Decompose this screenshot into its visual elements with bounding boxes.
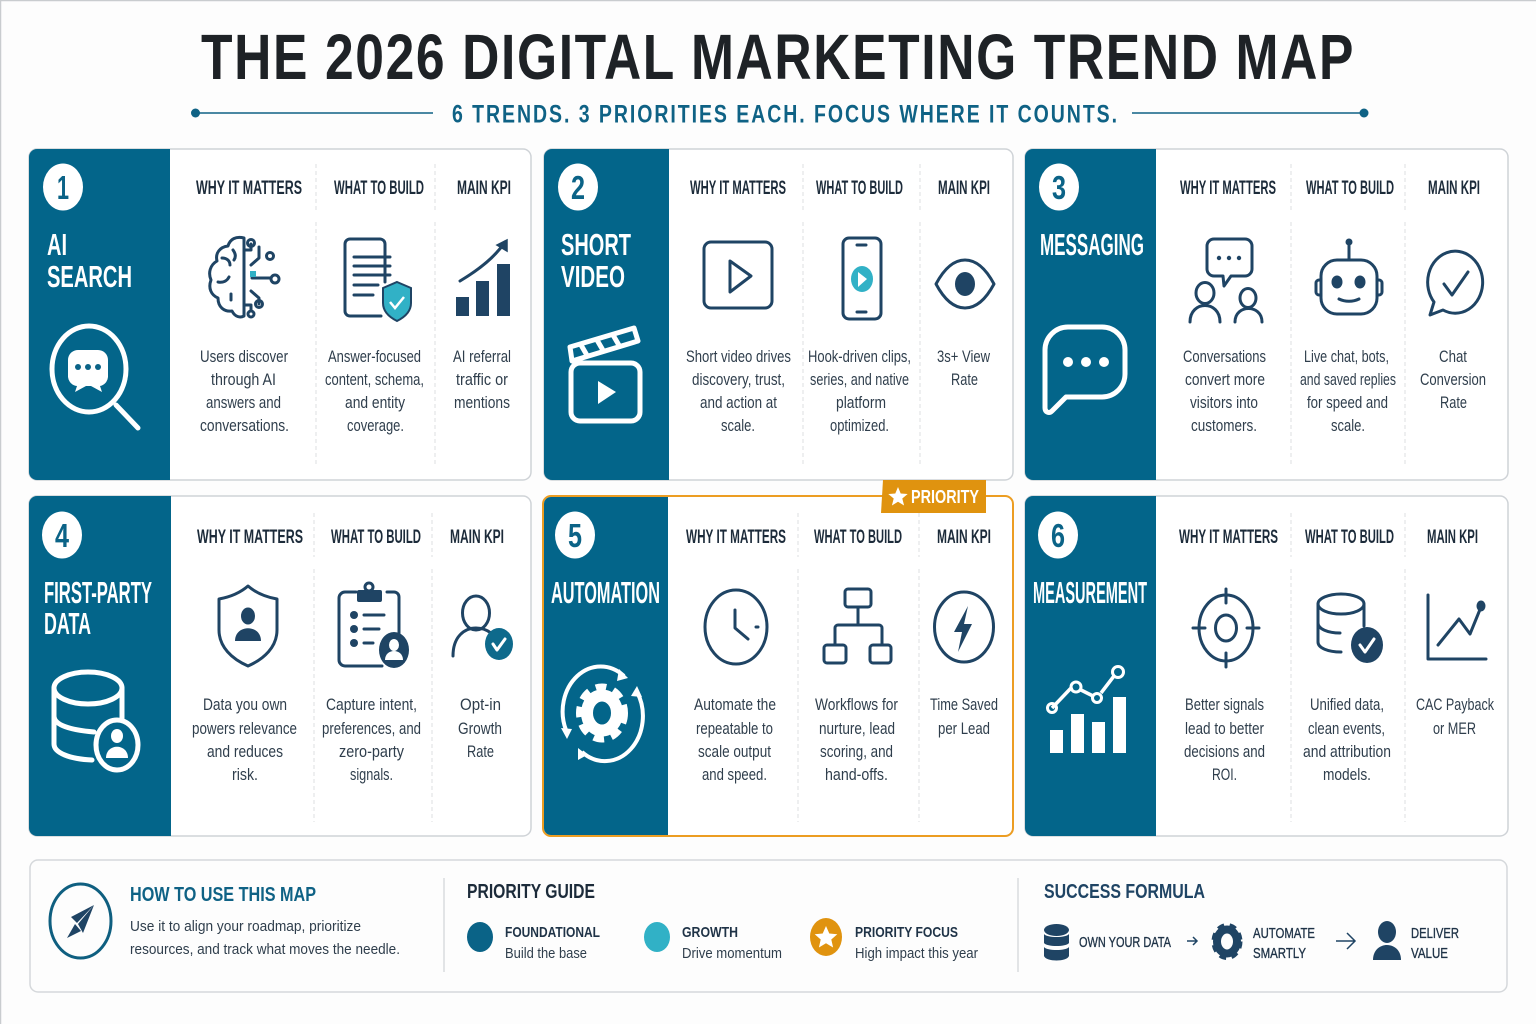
text: what to build: signals. [350,765,393,784]
text: why it matters: decisions and [1184,742,1265,761]
column headers: WHY IT MATTERS [1180,178,1276,199]
text: main kpi: 3s+ View [937,347,991,366]
text: what to build: for speed and [1307,393,1388,412]
column headers: WHY IT MATTERS [690,178,786,199]
heading: First-Party Data [44,575,152,641]
column headers: WHY IT MATTERS [686,527,786,548]
column headers [1180,178,1480,199]
text: main kpi [453,347,511,412]
column headers: MAIN KPI [1427,527,1478,548]
priority badge: PRIORITY [911,487,979,507]
number badge 1 [43,164,83,210]
text: why it matters: discovery, trust, [692,370,785,389]
text: why it matters: lead to better [1185,719,1264,738]
column headers: WHY IT MATTERS [1179,527,1278,548]
panel: 5 Automation (priority) [543,480,1013,836]
text: why it matters: conversations. [200,416,289,435]
automate smartly: AUTOMATE [1253,925,1315,942]
text: what to build: models. [1323,765,1371,784]
arrow [1336,933,1355,949]
how to use this map [130,884,400,958]
growth legend item [644,922,782,962]
column headers [1179,527,1478,548]
icon: lightning circle [934,592,994,662]
priority focus legend item [810,918,978,962]
text: what to build [1303,695,1391,784]
icon: magnifier with chat [52,326,138,428]
text: why it matters [694,695,776,784]
deliver value: DELIVER [1411,925,1459,942]
text: main kpi: CAC Payback [1416,695,1494,714]
text: what to build: optimized. [830,416,889,435]
text: why it matters: scale output [698,742,771,761]
text: why it matters: Short video drives [686,347,791,366]
text: why it matters: and reduces [207,742,283,761]
icon: clock [705,590,767,664]
text: what to build: content, schema, [325,370,424,389]
text: what to build [325,347,424,435]
text: main kpi: Growth [458,719,502,738]
text: main kpi [1416,695,1494,738]
number badge 3 [1039,164,1079,210]
text: main kpi: per Lead [938,719,990,738]
text: what to build: Live chat, bots, [1304,347,1389,366]
success formula: SUCCESS FORMULA [1044,881,1205,903]
text: what to build [815,695,898,784]
how to use this map: resources, and track what moves the needle. [130,941,400,958]
text: main kpi: traffic or [456,370,508,389]
text: what to build: Workflows for [815,695,898,714]
icon: growth bars [456,240,510,316]
text: what to build [808,347,911,435]
text: main kpi: AI referral [453,347,511,366]
number badge 6: 6 [1051,517,1065,554]
number badge 5: 5 [568,517,582,554]
text: main kpi: Chat [1439,347,1467,366]
icon: robot [1316,238,1382,314]
column headers: MAIN KPI [937,527,991,548]
text: what to build [322,695,421,784]
column headers [197,527,504,548]
text: why it matters: Conversations [1183,347,1266,366]
deliver value: VALUE [1411,945,1448,962]
icon: line chart [1428,595,1486,659]
column headers: WHAT TO BUILD [816,178,903,199]
text: why it matters: customers. [1191,416,1257,435]
text: main kpi: Rate [951,370,978,389]
foundational legend item: FOUNDATIONAL [505,924,600,941]
automate smartly [1253,925,1315,962]
panel: 2 Short Video [544,149,1013,480]
number badge 4 [42,512,82,558]
heading: Messaging: MESSAGING [1040,227,1144,262]
text: main kpi: or MER [1433,719,1476,738]
number badge 2 [558,164,598,210]
how to use this map: HOW TO USE THIS MAP [130,884,316,906]
priority guide: PRIORITY GUIDE [467,881,595,903]
text: main kpi: Opt-in [460,695,501,714]
icon: database with person [54,672,138,770]
icon: person [1373,921,1401,960]
number badge 5 [555,512,595,558]
text: main kpi: Time Saved [930,695,998,714]
success formula [1044,881,1459,962]
column headers [196,178,511,199]
subtitle with rule lines: 6 TRENDS. 3 PRIORITIES EACH. FOCUS WHERE IT COUNTS. [452,100,1119,128]
how to use this map: Use it to align your roadmap, prioritize [130,918,361,935]
text: why it matters: visitors into [1190,393,1258,412]
text: what to build: and saved replies [1300,370,1396,389]
text: main kpi: Conversion [1420,370,1486,389]
icon: clipboard with person [339,583,409,668]
panel: 4 First-Party Data [29,496,531,836]
automate smartly: SMARTLY [1253,945,1306,962]
text: why it matters: through AI [211,370,276,389]
column headers: WHAT TO BUILD [1306,178,1394,199]
number badge 1: 1 [57,169,69,206]
heading: AI Search: SEARCH [47,259,132,294]
text: main kpi [458,695,502,761]
text: why it matters: Automate the [694,695,776,714]
arrow [1187,937,1197,945]
deliver value [1411,925,1459,962]
text: what to build: platform [836,393,886,412]
icon: person with check [453,596,513,660]
column headers: WHY IT MATTERS [197,527,303,548]
text: why it matters [192,695,297,784]
icon: clapperboard [570,328,640,421]
text: why it matters: Better signals [1185,695,1264,714]
priority focus legend item: PRIORITY FOCUS [855,924,958,941]
number badge 4: 4 [55,517,69,554]
column headers: WHY IT MATTERS [196,178,302,199]
text: what to build: Answer-focused [328,347,421,366]
icon: document with shield [345,239,411,321]
text: why it matters: repeatable to [696,719,773,738]
text: what to build: Unified data, [1310,695,1384,714]
text: why it matters: convert more [1185,370,1265,389]
text: what to build [1300,347,1396,435]
panel: 1 AI Search [29,149,531,480]
text: why it matters [200,347,289,435]
foundational legend item: Build the base [505,945,587,962]
icon: phone with video [843,238,881,319]
icon: target [1193,589,1259,667]
text: what to build: Hook-driven clips, [808,347,911,366]
text: why it matters: answers and [206,393,281,412]
icon: gear with cycle arrows [561,666,643,761]
text: main kpi: mentions [454,393,510,412]
text: what to build: series, and native [810,370,909,389]
own your data: OWN YOUR DATA [1079,934,1171,951]
icon: workflow tree [824,589,891,663]
heading: AI Search [47,227,132,294]
text: what to build: clean events, [1308,719,1385,738]
column headers: MAIN KPI [938,178,990,199]
column headers [686,527,991,548]
icon: gear [1214,926,1240,958]
icon: video play frame [704,242,772,308]
heading: AI Search: AI [47,227,67,262]
number badge 2: 2 [571,169,585,206]
text: main kpi [930,695,998,738]
panel: 6 Measurement: MEASUREMENT [1033,575,1147,610]
column headers: MAIN KPI [1428,178,1480,199]
icon: two people conversation [1190,239,1262,322]
text: what to build: zero-party [339,742,404,761]
text: why it matters: and speed. [702,765,767,784]
heading: Short Video: VIDEO [561,259,625,294]
icon: shield with person [219,586,277,666]
text: what to build: coverage. [347,416,404,435]
text: what to build: preferences, and [322,719,421,738]
text: why it matters: and action at [700,393,777,412]
column headers: WHAT TO BUILD [1305,527,1394,548]
column headers: MAIN KPI [457,178,511,199]
icon: bar and line chart [1048,666,1126,753]
text: main kpi [937,347,991,389]
priority badge [881,480,986,513]
text: why it matters [1183,347,1266,435]
priority focus legend item: High impact this year [855,945,978,962]
icon: speech bubble [1045,327,1125,412]
text: why it matters: scale. [721,416,755,435]
text: main kpi: Rate [467,742,494,761]
text: what to build: and entity [345,393,405,412]
heading: First-Party Data: DATA [44,606,91,641]
icon: chat check [1428,251,1483,315]
icon: eye [936,260,994,308]
text: what to build: hand-offs. [825,765,888,784]
text: main kpi: Rate [1440,393,1467,412]
icon: brain circuit [210,237,279,317]
text: why it matters [686,347,791,435]
column headers: WHAT TO BUILD [814,527,902,548]
panel: 3 Messaging [1025,149,1508,480]
text: what to build: Capture intent, [326,695,417,714]
text: why it matters [1184,695,1265,784]
column headers: WHAT TO BUILD [331,527,421,548]
heading: Short Video [561,227,631,294]
panel: footer [30,860,1507,992]
priority guide [467,881,978,962]
text: why it matters: Users discover [200,347,288,366]
heading: Short Video: SHORT [561,227,631,262]
growth legend item: GROWTH [682,924,738,941]
growth legend item: Drive momentum [682,945,782,962]
number badge 6 [1038,512,1078,558]
column headers: MAIN KPI [450,527,504,548]
text: what to build: nurture, lead [819,719,895,738]
text: why it matters: Data you own [203,695,287,714]
icon: database with check [1318,594,1383,663]
text: why it matters: risk. [232,765,258,784]
text: why it matters: ROI. [1212,765,1237,784]
heading: First-Party Data: FIRST-PARTY [44,575,152,610]
panel: 6 Measurement [1025,496,1508,836]
icon: compass navigation [50,884,111,958]
column headers: WHAT TO BUILD [334,178,424,199]
text: what to build: scoring, and [820,742,893,761]
text: why it matters: powers relevance [192,719,297,738]
column headers [690,178,990,199]
foundational legend item [467,922,600,962]
heading: Automation: AUTOMATION [551,575,660,610]
icon: database [1044,924,1069,960]
text: what to build: scale. [1331,416,1365,435]
text: main kpi [1420,347,1486,412]
number badge 3: 3 [1052,169,1066,206]
text: what to build: and attribution [1303,742,1391,761]
